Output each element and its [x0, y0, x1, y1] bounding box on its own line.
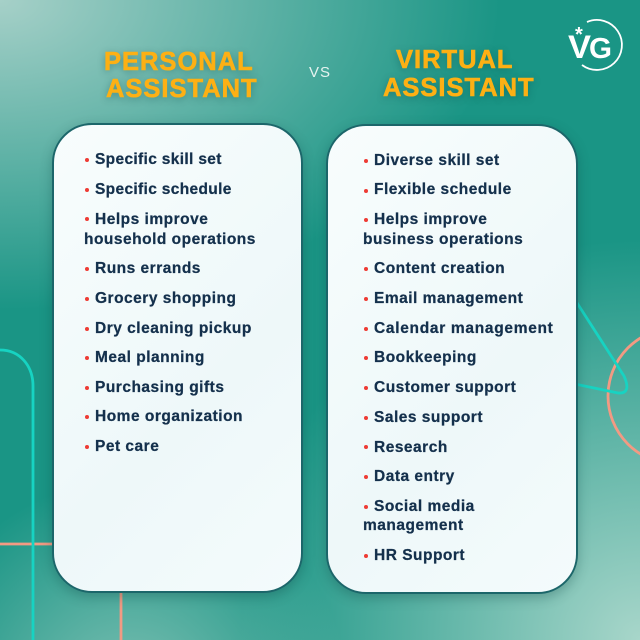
heading: virtual assistant: VIRTUAL	[396, 46, 514, 74]
list: virtual assistant duties: management	[363, 517, 464, 534]
list: personal assistant duties: Dry cleaning pickup	[95, 320, 252, 337]
logo: VG: G	[589, 33, 612, 65]
heading: personal assistant: PERSONAL	[104, 48, 254, 76]
list: personal assistant duties: Specific schedule	[95, 181, 232, 198]
logo: VG: *	[575, 24, 583, 46]
list: personal assistant duties: Helps improve	[95, 211, 208, 228]
list: virtual assistant duties: Flexible schedule	[374, 181, 512, 198]
list: virtual assistant duties: Diverse skill set	[374, 152, 500, 169]
list: personal assistant duties: Grocery shopping	[95, 290, 236, 307]
panel: virtual assistant	[326, 124, 578, 594]
list: personal assistant duties: Home organization	[95, 408, 243, 425]
list: personal assistant duties: Meal planning	[95, 349, 205, 366]
list: virtual assistant duties: Sales support	[374, 409, 483, 426]
list: virtual assistant duties: Email management	[374, 290, 523, 307]
list: personal assistant duties: Specific skill set	[95, 151, 222, 168]
logo: VG: V	[568, 29, 592, 65]
list: virtual assistant duties: business operations	[363, 231, 523, 248]
list: virtual assistant duties: Research	[374, 439, 448, 456]
list: virtual assistant duties: Customer support	[374, 379, 516, 396]
logo: VG	[568, 19, 623, 71]
heading: personal assistant	[102, 48, 258, 103]
list: virtual assistant duties: HR Support	[374, 547, 465, 564]
heading: personal assistant: ASSISTANT	[106, 75, 258, 103]
list: virtual assistant duties: Content creation	[374, 260, 505, 277]
list: virtual assistant duties: Social media	[374, 498, 475, 515]
label: vs: VS	[309, 64, 331, 81]
heading: virtual assistant	[382, 46, 535, 102]
list: virtual assistant duties: Helps improve	[374, 211, 487, 228]
list: virtual assistant duties: Bookkeeping	[374, 349, 477, 366]
list: personal assistant duties: Purchasing gifts	[95, 379, 224, 396]
panel: personal assistant	[52, 123, 303, 593]
list: personal assistant duties: Pet care	[95, 438, 159, 455]
list: virtual assistant duties: Calendar management	[374, 320, 554, 337]
list: personal assistant duties: Runs errands	[95, 260, 201, 277]
list: personal assistant duties: household operations	[84, 231, 256, 248]
list: virtual assistant duties: Data entry	[374, 468, 455, 485]
heading: virtual assistant: ASSISTANT	[383, 74, 535, 102]
